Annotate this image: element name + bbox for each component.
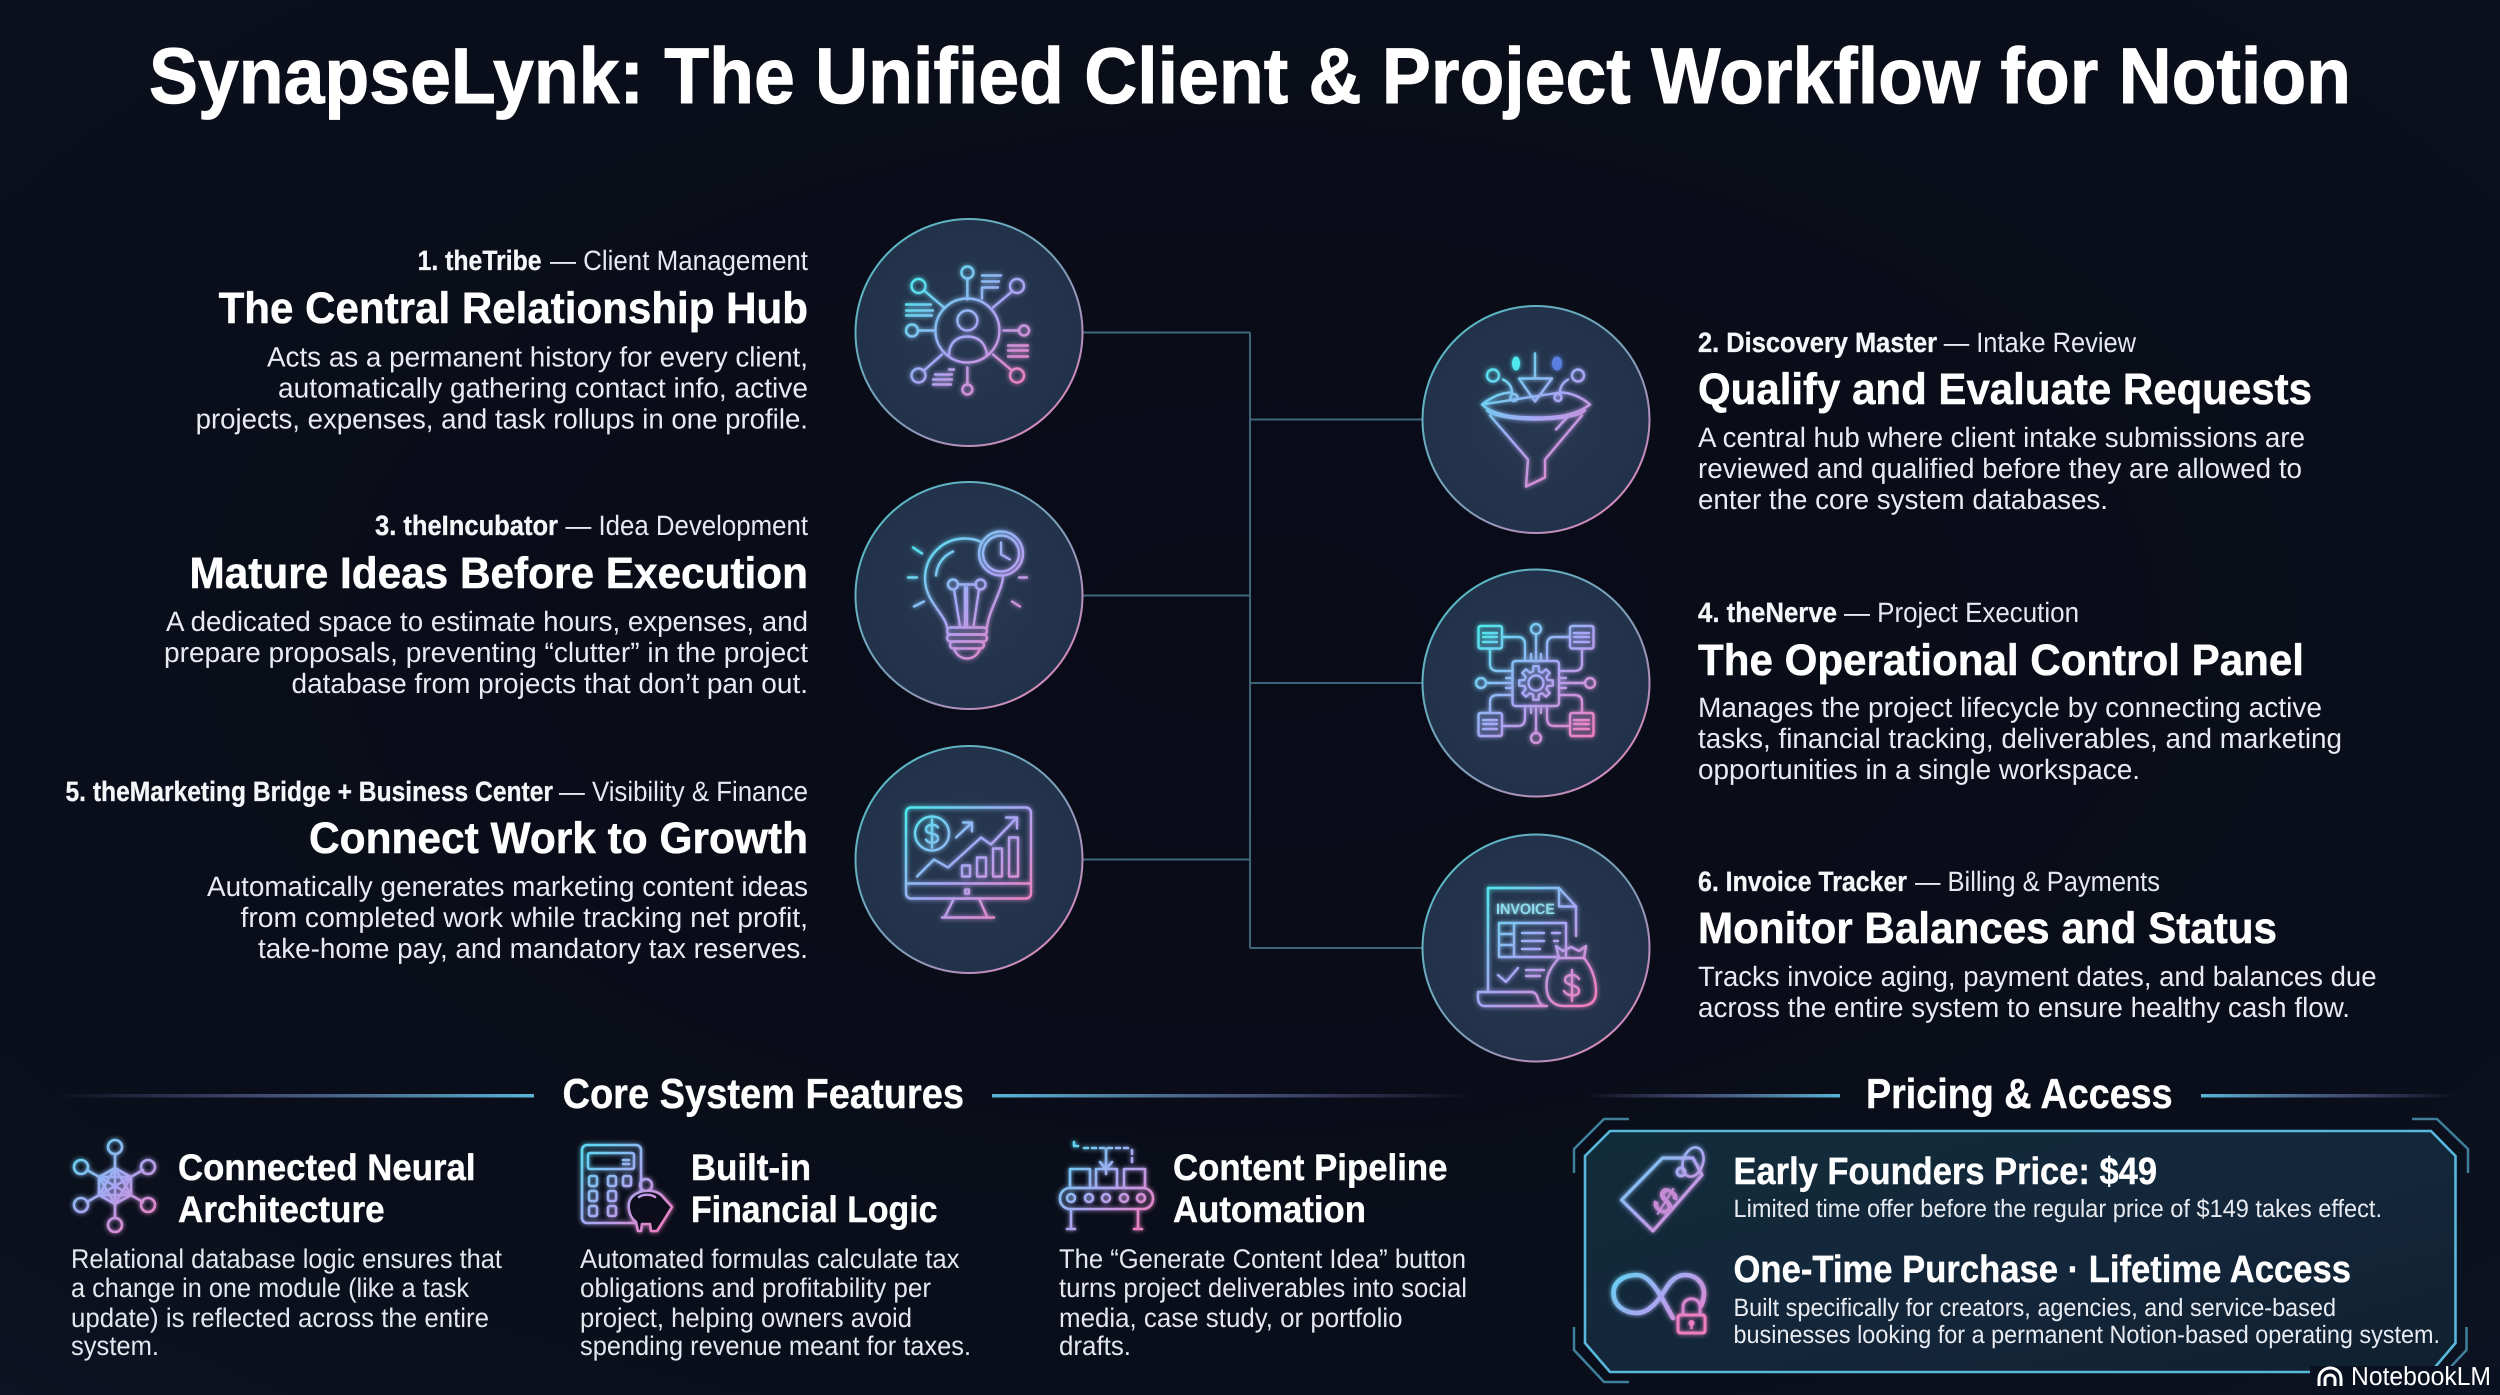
feature body: drafts. xyxy=(1059,1331,1131,1361)
body 6: Tracks invoice aging, payment dates, and balances due xyxy=(1698,961,2376,992)
feature heading: Architecture xyxy=(178,1189,385,1230)
feature body: system. xyxy=(71,1331,159,1361)
icon: neural network xyxy=(74,1140,155,1232)
feature heading xyxy=(178,1147,476,1230)
icon: intake funnel xyxy=(1422,306,1650,533)
icon: invoice and money bag xyxy=(1422,834,1650,1062)
feature: built-in financial logic xyxy=(580,1145,971,1361)
label 1 xyxy=(418,245,808,276)
body 4 xyxy=(1698,692,2342,785)
block 1: theTribe xyxy=(196,245,808,434)
icon: growth monitor xyxy=(856,746,1082,973)
icon: price tag xyxy=(1622,1145,1707,1231)
watermark: NotebookLM xyxy=(2310,1361,2500,1395)
feature heading xyxy=(1173,1147,1448,1230)
panel: pricing and access xyxy=(1574,1070,2468,1382)
label 1: — Client Management xyxy=(550,245,808,276)
body 2: A central hub where client intake submissions are xyxy=(1698,422,2305,453)
label 3 xyxy=(375,510,808,541)
body 5 xyxy=(207,871,808,964)
icon: price tag: $ xyxy=(1645,1178,1685,1225)
body 2: enter the core system databases. xyxy=(1698,484,2108,515)
feature body: spending revenue meant for taxes. xyxy=(580,1331,971,1361)
block 2: Discovery Master xyxy=(1698,327,2312,515)
body 4: tasks, financial tracking, deliverables, and marketing xyxy=(1698,723,2342,754)
body 1: projects, expenses, and task rollups in one profile. xyxy=(196,404,808,434)
section heading: pricing and access: Pricing & Access xyxy=(1866,1070,2173,1117)
body 3: prepare proposals, preventing “clutter” in the project xyxy=(164,637,808,668)
feature heading: Built-in xyxy=(691,1147,811,1188)
icon: client hub xyxy=(856,219,1082,446)
body 4: opportunities in a single workspace. xyxy=(1698,754,2140,785)
label 4 xyxy=(1698,597,2079,628)
label 2: 2. Discovery Master xyxy=(1698,327,1937,358)
icon: light bulb with clock xyxy=(856,482,1082,709)
label 5: 5. theMarketing Bridge + Business Center xyxy=(66,776,553,807)
block 4: theNerve xyxy=(1698,597,2342,785)
connector lines xyxy=(1083,332,1423,948)
label 3: — Idea Development xyxy=(566,510,808,541)
label 3: 3. theIncubator xyxy=(375,510,558,541)
feature body: update) is reflected across the entire xyxy=(71,1303,489,1333)
feature body: a change in one module (like a task xyxy=(71,1273,469,1303)
body 1: Acts as a permanent history for every client, xyxy=(267,342,808,372)
feature body: The “Generate Content Idea” button xyxy=(1059,1244,1466,1274)
pricing item: early founders price xyxy=(1734,1151,2382,1223)
label 6 xyxy=(1698,866,2160,897)
pricing item: one-time purchase: One-Time Purchase · Lifetime Access xyxy=(1734,1249,2351,1291)
heading 2: Qualify and Evaluate Requests xyxy=(1698,365,2312,414)
pricing item: one-time purchase xyxy=(1734,1249,2440,1349)
feature heading: Content Pipeline xyxy=(1173,1147,1448,1188)
label 6: — Billing & Payments xyxy=(1915,866,2160,897)
feature heading: Financial Logic xyxy=(691,1189,938,1230)
body 2 xyxy=(1698,422,2305,515)
pricing item: early founders price: Limited time offer before the regular price of $149 takes effect. xyxy=(1734,1195,2382,1223)
label 5: — Visibility & Finance xyxy=(559,776,808,807)
heading 1: The Central Relationship Hub xyxy=(219,284,808,333)
title: SynapseLynk: The Unified Client & Project Workflow for Notion xyxy=(149,31,2351,120)
panel: core system features xyxy=(57,1070,1473,1361)
body 5: from completed work while tracking net profit, xyxy=(240,902,808,933)
label 2 xyxy=(1698,327,2137,358)
feature body: turns project deliverables into social xyxy=(1059,1273,1467,1303)
section heading: pricing and access xyxy=(1586,1070,2456,1117)
label 2: — Intake Review xyxy=(1944,327,2137,358)
pricing item: early founders price: Early Founders Price: $49 xyxy=(1734,1151,2157,1193)
feature heading: Connected Neural xyxy=(178,1147,476,1188)
body 3: A dedicated space to estimate hours, expenses, and xyxy=(166,606,808,637)
label 6: 6. Invoice Tracker xyxy=(1698,866,1907,897)
block 6: Invoice Tracker xyxy=(1698,866,2376,1023)
section heading: core system features: Core System Features xyxy=(562,1070,964,1117)
block 5: theMarketing Bridge xyxy=(66,776,808,964)
pricing box frame xyxy=(1574,1119,2468,1382)
body 6: across the entire system to ensure healthy cash flow. xyxy=(1698,992,2350,1023)
icon: conveyor belt xyxy=(1060,1142,1153,1229)
heading 3: Mature Ideas Before Execution xyxy=(190,549,808,598)
body 5: take-home pay, and mandatory tax reserves. xyxy=(258,933,808,964)
feature: connected neural architecture xyxy=(71,1140,502,1361)
feature: content pipeline automation xyxy=(1059,1142,1467,1361)
label 4: 4. theNerve xyxy=(1698,597,1837,628)
icon: calculator and piggy bank xyxy=(582,1145,672,1231)
heading 6: Monitor Balances and Status xyxy=(1698,904,2277,953)
feature body: project, helping owners avoid xyxy=(580,1303,912,1333)
feature body: Automated formulas calculate tax xyxy=(580,1244,960,1274)
feature body xyxy=(71,1244,502,1361)
heading 4: The Operational Control Panel xyxy=(1698,636,2304,685)
feature body xyxy=(1059,1244,1467,1361)
body 2: reviewed and qualified before they are allowed to xyxy=(1698,453,2302,484)
block 3: theIncubator xyxy=(164,510,808,699)
body 4: Manages the project lifecycle by connecting active xyxy=(1698,692,2322,723)
watermark: NotebookLM: NotebookLM xyxy=(2351,1361,2491,1391)
feature heading: Automation xyxy=(1173,1189,1366,1230)
section heading: core system features xyxy=(57,1070,1473,1117)
pricing item: one-time purchase: businesses looking for a permanent Notion-based operating system. xyxy=(1734,1321,2440,1349)
pricing item: one-time purchase: Built specifically for creators, agencies, and service-based xyxy=(1734,1294,2336,1322)
body 6 xyxy=(1698,961,2376,1023)
feature body: media, case study, or portfolio xyxy=(1059,1303,1402,1333)
feature body: Relational database logic ensures that xyxy=(71,1244,502,1274)
body 1 xyxy=(196,342,808,434)
heading 5: Connect Work to Growth xyxy=(309,814,808,863)
body 1: automatically gathering contact info, active xyxy=(278,372,808,404)
label 4: — Project Execution xyxy=(1844,597,2079,628)
feature heading xyxy=(691,1147,938,1230)
icon: infinity lock xyxy=(1614,1275,1705,1333)
body 3 xyxy=(164,606,808,699)
icon: control chip xyxy=(1422,570,1650,796)
icon: invoice and money bag: INVOICE xyxy=(1496,901,1555,918)
body 3: database from projects that don’t pan out. xyxy=(292,668,808,699)
feature body: obligations and profitability per xyxy=(580,1273,931,1303)
feature body xyxy=(580,1244,971,1361)
label 1: 1. theTribe xyxy=(418,245,542,276)
body 5: Automatically generates marketing content ideas xyxy=(207,871,808,902)
